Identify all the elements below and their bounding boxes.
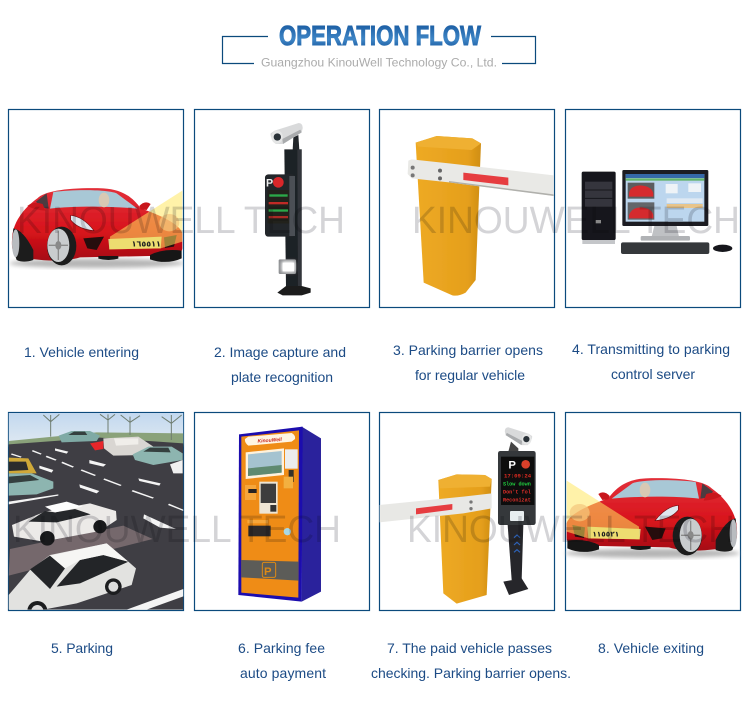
auto payment machine: KinouWell (257, 437, 283, 445)
caption 4: 4. Transmitting to parking (572, 341, 730, 357)
panel 3 frame (380, 110, 554, 308)
caption 4: control server (611, 366, 695, 382)
caption 3 (393, 342, 543, 383)
checking display pole: P (508, 460, 516, 472)
caption 4 (572, 341, 730, 382)
caption 6: auto payment (240, 665, 326, 681)
panel 4: control server computer (566, 110, 740, 308)
panel 6: payment kiosk (194, 412, 370, 610)
panel 8: vehicle exiting (565, 412, 740, 610)
panel 2: camera and display pole (194, 110, 370, 308)
car with plate scan beam: ١١٥٥٢١ (592, 529, 619, 538)
checking display pole: Don't fol (503, 490, 531, 496)
auto payment machine: P (264, 566, 272, 578)
checking display pole: Slow down (503, 482, 531, 488)
barrier cabinet and arm (380, 474, 492, 604)
watermark row 2 right: KINOUWELL TECH (407, 509, 735, 551)
license plate camera pole: P (266, 178, 273, 190)
panel 5: parking lot scene (8, 412, 184, 621)
caption 7: checking. Parking barrier opens. (371, 665, 571, 681)
desktop computer and monitor (582, 170, 732, 254)
panel 4 frame (566, 110, 740, 308)
panel 2 frame (194, 110, 370, 308)
title: OPERATION FLOW (279, 20, 481, 51)
checking display pole: 17:09:24 (504, 472, 532, 479)
panel 8 frame (566, 412, 740, 610)
watermark row 2 left: KINOUWELL TECH (13, 509, 341, 551)
caption 2: 2. Image capture and (214, 344, 346, 360)
car with plate scan beam: ١٦٥٥١١ (132, 240, 161, 249)
caption 7: 7. The paid vehicle passes (387, 640, 552, 656)
checking display pole (498, 427, 536, 595)
barrier cabinet and arm (408, 136, 554, 296)
watermark row 1 left: KINOUWELL TECH (17, 200, 345, 242)
header: title and subtitle (222, 20, 536, 70)
panel 3: barrier gate open (380, 110, 554, 308)
caption 1: 1. Vehicle entering (24, 344, 139, 360)
caption 7 (371, 640, 571, 681)
watermark row 1 right: KINOUWELL TECH (412, 200, 740, 242)
caption 6 (238, 640, 326, 681)
panel 7 frame (380, 412, 554, 610)
caption 5: 5. Parking (51, 640, 113, 656)
subtitle: Guangzhou KinouWell Technology Co., Ltd. (261, 56, 497, 70)
panel 6 frame (194, 412, 370, 610)
panel 5 frame (8, 412, 184, 610)
caption 6: 6. Parking fee (238, 640, 325, 656)
caption 3: for regular vehicle (415, 367, 525, 383)
caption 3: 3. Parking barrier opens (393, 342, 543, 358)
auto payment machine (238, 427, 321, 602)
panel 1 frame (8, 110, 184, 308)
caption 8: 8. Vehicle exiting (598, 640, 704, 656)
parking lot illustration (9, 413, 183, 621)
title bracket left (222, 36, 268, 64)
panel 1: vehicle entering (8, 110, 184, 308)
car with plate scan beam (565, 478, 740, 558)
caption 2: plate recognition (231, 369, 333, 385)
title bracket right (491, 36, 536, 64)
panel 7: barrier and checking pole (380, 412, 554, 610)
checking display pole: Reconizat (503, 498, 531, 504)
license plate camera pole (265, 123, 311, 295)
car with plate scan beam (9, 188, 184, 268)
caption 2 (214, 344, 346, 385)
